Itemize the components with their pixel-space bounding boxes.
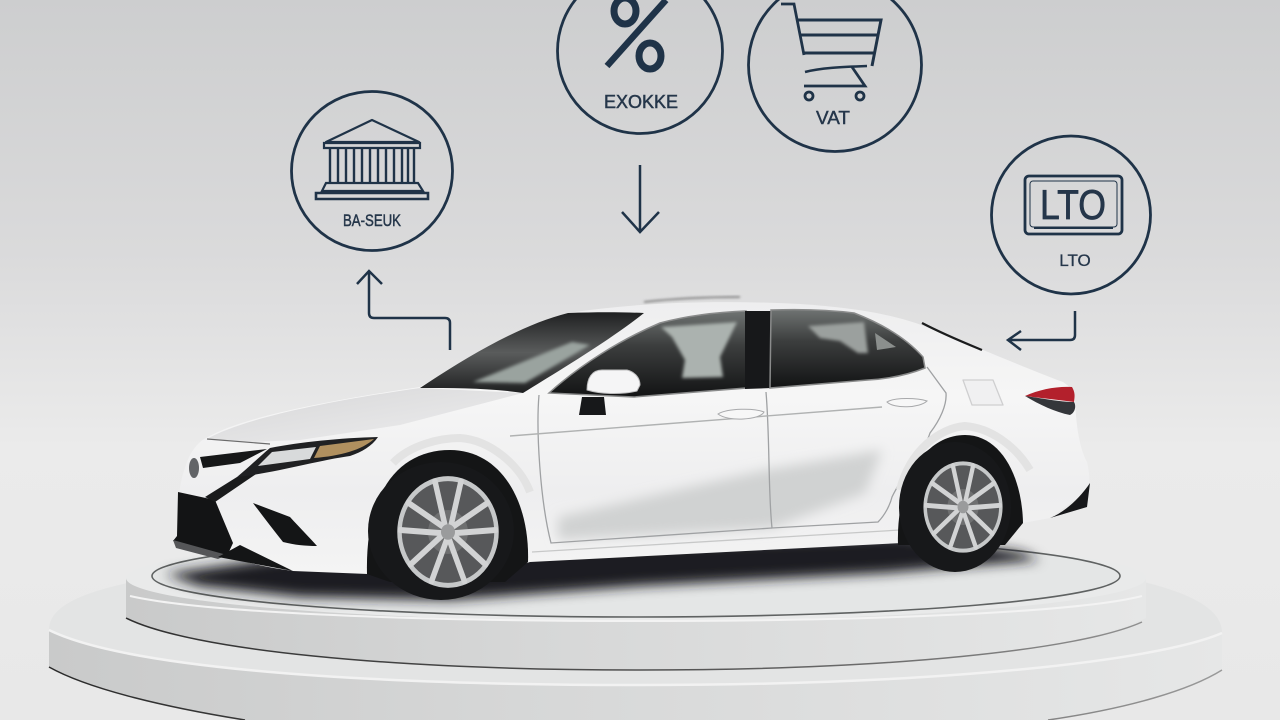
car: rear spoiler line: [922, 323, 982, 350]
car: front wheel: [367, 450, 528, 600]
car: side mirror: [579, 370, 640, 415]
car: front window light patch: [661, 322, 737, 378]
circle outline: [558, 0, 722, 134]
car: tail light: [1025, 387, 1075, 415]
circle outline: [992, 136, 1150, 294]
car: rear window light patch: [808, 322, 868, 353]
car: roof antenna line: [644, 297, 740, 302]
car: [173, 297, 1090, 600]
arrow: car to bank: [357, 271, 450, 350]
car: hood: [207, 388, 523, 442]
icon: shopping cart: [781, 4, 881, 100]
car: fender highlights: [393, 426, 1030, 492]
label: VAT: VAT: [816, 108, 850, 128]
car: lower intake: [218, 545, 293, 571]
car: door handles: [718, 398, 927, 419]
car: front grille: [173, 492, 233, 556]
car: bumper vent: [253, 503, 317, 546]
podium: lower tier: [49, 570, 1222, 720]
podium: upper tier: [126, 535, 1146, 670]
podium: [49, 535, 1222, 720]
label: LTO: LTO: [1059, 251, 1091, 270]
label: EXOKKE: EXOKKE: [604, 92, 678, 112]
car: upper grille and badge: [189, 449, 267, 502]
car: quarter window: [875, 333, 896, 350]
circle outline: [748, 0, 922, 152]
icon: percent sign: [607, 0, 666, 69]
icon group: base/bank: [292, 92, 452, 250]
car: headlight: [237, 437, 378, 477]
car: rear diffuser: [1050, 483, 1090, 518]
car: door lower shading: [558, 450, 882, 540]
car: body shell: [178, 302, 1089, 574]
car: front lip: [173, 540, 227, 559]
car: rear wheel: [898, 435, 1023, 572]
car: front side window: [549, 311, 746, 397]
icon: licence plate: [1025, 176, 1122, 234]
icon group: VAT cart: [748, 0, 922, 152]
car: rear side window: [770, 310, 925, 388]
arrow: percent to car: [622, 165, 659, 232]
car: B pillar: [745, 311, 772, 389]
circle outline: [292, 92, 452, 250]
arrow: LTO to car: [1008, 311, 1075, 350]
car: door seams and body lines: [510, 367, 1003, 552]
car shadow: [165, 535, 1040, 600]
icon group: percent: [558, 0, 722, 134]
car: nose panel line: [207, 439, 270, 444]
icon: licence plate: LTO: [1040, 181, 1106, 228]
icon: bank building: [316, 120, 428, 199]
icon group: LTO: [992, 136, 1150, 294]
car: windshield: [420, 312, 644, 393]
label: BASEUK: BA-SEUK: [343, 211, 402, 230]
